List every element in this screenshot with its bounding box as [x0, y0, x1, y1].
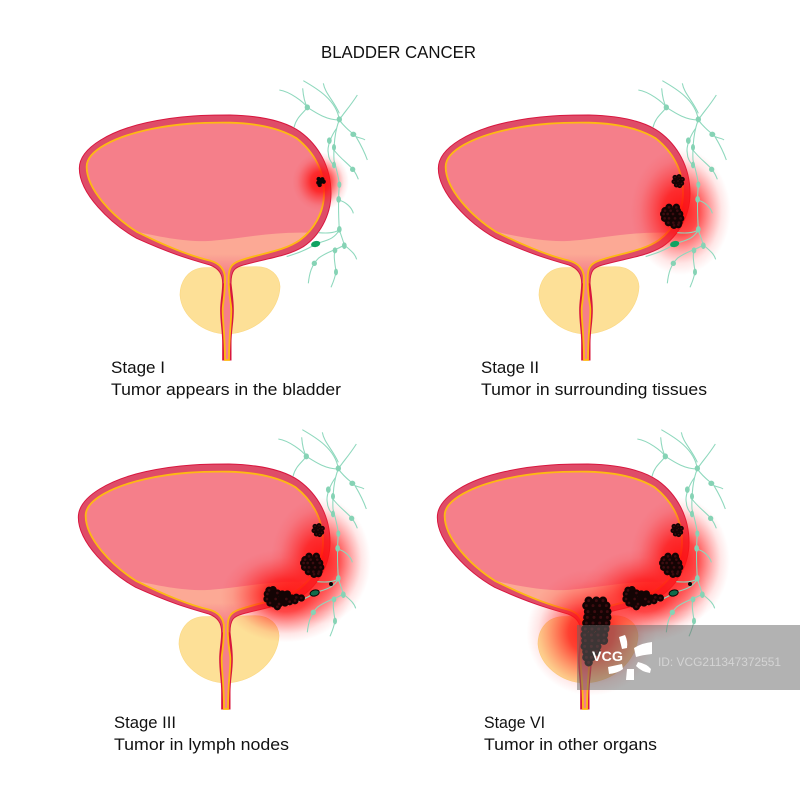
caption: stage I: Stage I [111, 359, 165, 377]
caption: stage II [481, 359, 707, 399]
diagram: bladder stage II [438, 81, 731, 360]
caption: stage I: Tumor appears in the bladder [111, 381, 342, 399]
title: BLADDER CANCER [321, 42, 476, 62]
caption: stage III [114, 714, 289, 754]
tumor: invading column [585, 601, 607, 662]
caption: stage VI [484, 714, 657, 754]
panel: stage VI [437, 430, 730, 754]
panel: stage I [79, 81, 367, 399]
diagram: bladder stage III [78, 430, 371, 709]
caption: stage III: Stage III [114, 714, 176, 732]
caption: stage I [111, 359, 342, 399]
caption: stage II: Tumor in surrounding tissues [481, 381, 707, 399]
watermark id text: ID: VCG211347372551 [658, 657, 781, 669]
panel: stage II [438, 81, 731, 399]
diagram: bladder stage I [79, 81, 367, 360]
caption: stage III: Tumor in lymph nodes [114, 736, 289, 754]
watermark logo text: VCG [592, 648, 623, 664]
infographic canvas [78, 46, 800, 754]
caption: stage VI: Stage VI [484, 714, 545, 732]
diagram: bladder stage VI [437, 430, 730, 709]
caption: stage VI: Tumor in other organs [484, 736, 657, 754]
icon: watermark logo [608, 635, 652, 680]
panel: stage III [78, 430, 371, 754]
caption: stage II: Stage II [481, 359, 539, 377]
watermark band [577, 625, 800, 690]
